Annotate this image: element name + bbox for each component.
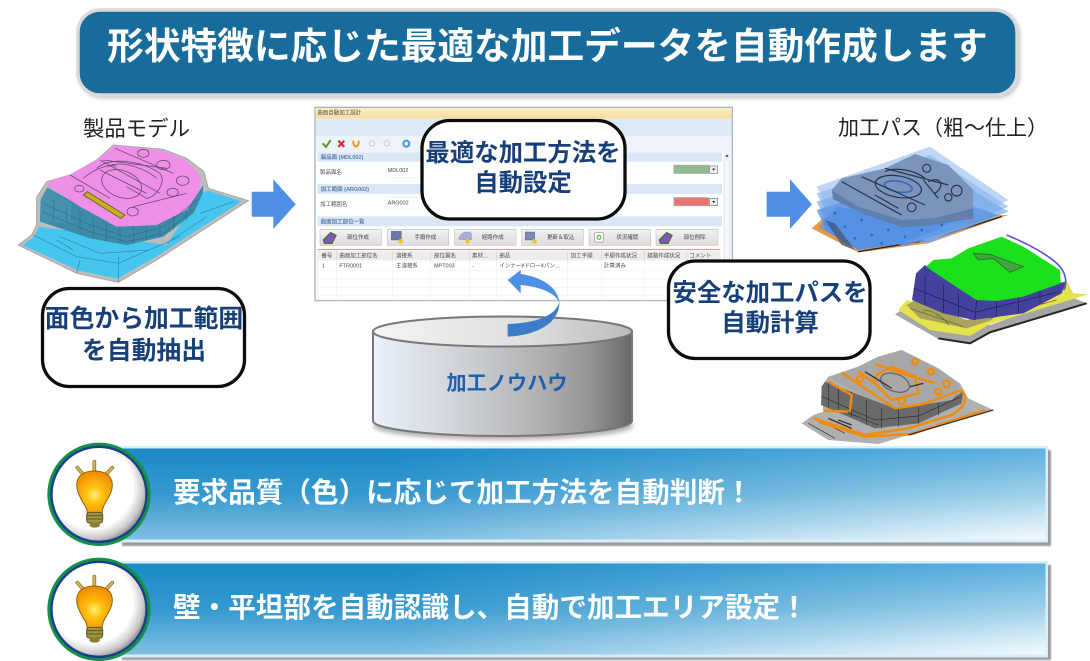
icon: light bulb 1 xyxy=(47,443,151,546)
parts table: 1 xyxy=(322,264,325,270)
bar 2 text: 壁・平坦部を自動認識し、自動で加工エリア設定！ xyxy=(173,592,808,623)
database: machining know-how xyxy=(373,316,633,440)
buttons: 部位作成 xyxy=(347,233,369,241)
window title bar xyxy=(316,108,732,119)
section: machining area: 加工範囲名 xyxy=(320,200,347,208)
parts table: 溶接系 xyxy=(396,251,413,259)
parts table: 加工手順 xyxy=(571,251,593,259)
parts table: 部位置名 xyxy=(434,251,456,259)
arrow: settings to tool paths xyxy=(767,179,812,229)
parts table: 曲面加工部位名 xyxy=(339,251,378,259)
buttons: 経路作成 xyxy=(482,233,504,241)
section: list of parts xyxy=(317,216,722,226)
parts table: 部品 xyxy=(499,252,511,259)
section: product surface: 製品面名 xyxy=(320,168,342,176)
buttons: 更新＆取込 xyxy=(547,233,575,241)
parts table: MPT003 xyxy=(434,264,455,270)
parts table: コメント xyxy=(689,252,711,259)
parts table: - xyxy=(472,264,474,270)
callout: optimal machining method xyxy=(422,120,625,219)
parts table: FTR0001 xyxy=(339,264,362,270)
title banner xyxy=(78,10,1020,98)
callout: safe tool path calculation: 自動計算 xyxy=(721,310,819,337)
model: roughing path xyxy=(812,147,1008,252)
section: product surface: MDL002 xyxy=(388,168,408,174)
parts table: 手順作成状況 xyxy=(604,251,637,259)
buttons: 状況確認 xyxy=(616,233,639,241)
database: machining know-how: 加工ノウハウ xyxy=(446,372,568,395)
toolbar icons xyxy=(323,140,409,147)
parts table xyxy=(318,249,720,300)
arrow: model to settings xyxy=(252,179,296,229)
parts table: 主溶接系 xyxy=(396,262,418,270)
callout bar 2 xyxy=(120,561,1051,660)
label: tool paths: 加工パス（粗～仕上） xyxy=(838,117,1048,140)
buttons: 手順作成 xyxy=(414,233,437,241)
section: machining area xyxy=(317,184,722,209)
parts table: インナー¥ドロー¥パン… xyxy=(499,263,561,270)
parts table: 素材… xyxy=(472,251,488,259)
label: product model: 製品モデル xyxy=(83,117,190,141)
product model 3D image xyxy=(18,145,248,282)
section: machining area: 加工範囲 (ARG002) xyxy=(321,185,369,193)
callout: safe tool path calculation xyxy=(668,261,870,358)
section: machining area: ARG002 xyxy=(388,200,409,206)
callout bar 1 xyxy=(120,446,1051,546)
callout: optimal machining method: 最適な加工方法を xyxy=(425,140,621,167)
callout: extract area from face colours xyxy=(42,288,244,386)
parts table: 番号 xyxy=(321,252,333,259)
scrollbar xyxy=(723,152,731,299)
model: semi-finishing path xyxy=(895,235,1089,344)
model: finishing path xyxy=(802,350,993,444)
curved arrow: know-how feeds settings xyxy=(508,270,559,337)
section: list of parts: 曲面加工部位一覧 xyxy=(321,217,365,225)
title banner: 形状特徴に応じた最適な加工データを自動作成します xyxy=(107,26,988,67)
section: product surface xyxy=(317,152,722,177)
callout: extract area from face colours: 面色から加工範囲 xyxy=(45,305,243,333)
buttons xyxy=(320,229,718,245)
bar 1 text: 要求品質（色）に応じて加工方法を自動判断！ xyxy=(173,477,752,508)
window title bar: 曲面自動加工設計 xyxy=(317,109,362,117)
icon: light bulb 2 xyxy=(47,558,151,661)
callout: extract area from face colours: を自動抽出 xyxy=(82,337,206,365)
buttons: 部位削除 xyxy=(684,233,706,241)
section: product surface: 製品面 (MDL002) xyxy=(321,153,363,161)
callout: optimal machining method: 自動設定 xyxy=(474,170,572,197)
parts table: 経路作成状況 xyxy=(647,251,681,259)
software dialog window xyxy=(315,107,732,301)
parts table: 計算済み xyxy=(604,262,626,270)
callout: safe tool path calculation: 安全な加工パスを xyxy=(672,280,868,307)
